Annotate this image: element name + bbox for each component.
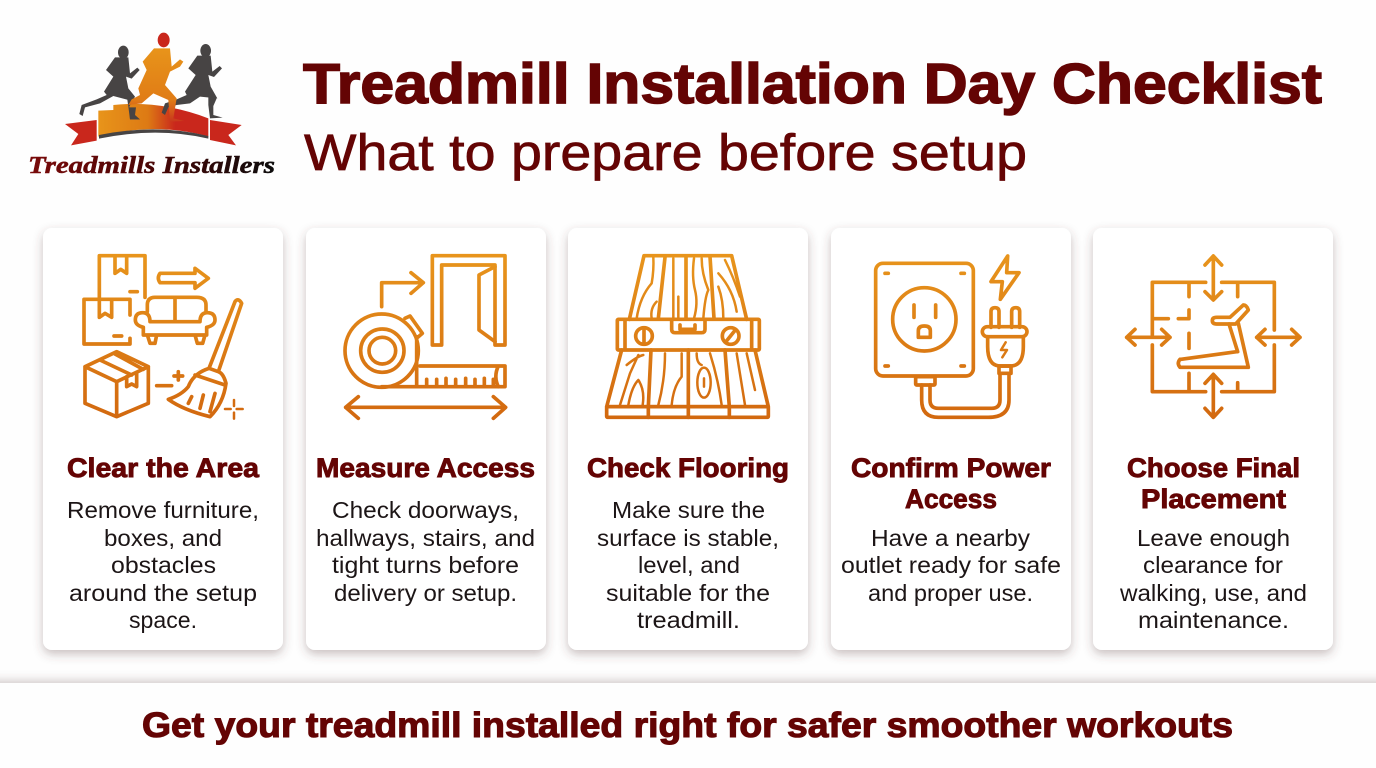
description: and proper use. — [868, 580, 1033, 606]
description — [597, 497, 779, 633]
icon: room plan with treadmill and arrows — [1127, 256, 1300, 417]
description: hallways, stairs, and — [316, 525, 535, 551]
description — [841, 525, 1061, 606]
panel: check flooring — [568, 228, 808, 650]
logo artwork: runners and ribbon — [65, 33, 242, 145]
description: tight turns before — [332, 552, 519, 578]
description: maintenance. — [1138, 607, 1289, 633]
logo wordmark: Treadmills Installers — [28, 153, 275, 179]
logo: Treadmills Installers — [28, 33, 275, 179]
description: walking, use, and — [1119, 580, 1307, 606]
heading: Choose Final — [1127, 453, 1300, 483]
description — [316, 497, 535, 606]
panel: confirm power access — [831, 228, 1071, 650]
description: space. — [129, 607, 197, 633]
panel: clear the area — [43, 228, 283, 650]
heading: Clear the Area — [67, 453, 260, 483]
description: surface is stable, — [597, 525, 779, 551]
description — [1119, 525, 1307, 633]
description: around the setup — [69, 580, 257, 606]
footer band — [0, 683, 1376, 768]
title: Treadmill Installation Day Checklist — [303, 52, 1322, 116]
description: Remove furniture, — [67, 497, 259, 523]
footer call to action: Get your treadmill installed right for safer smoother workouts — [142, 706, 1233, 745]
description: Leave enough — [1137, 525, 1290, 551]
icon: wood floor and spirit level — [607, 256, 768, 417]
icon: boxes, sofa and broom — [84, 256, 243, 419]
icon: wall outlet and plug — [876, 256, 1027, 417]
description: Have a nearby — [871, 525, 1030, 551]
heading — [1127, 453, 1300, 514]
heading: Measure Access — [316, 453, 535, 483]
panel: choose final placement — [1093, 228, 1333, 650]
description: delivery or setup. — [334, 580, 517, 606]
heading — [851, 453, 1052, 514]
description: Check doorways, — [332, 497, 519, 523]
description: obstacles — [111, 552, 216, 578]
heading: Confirm Power — [851, 453, 1052, 483]
description: Make sure the — [612, 497, 765, 523]
heading: Access — [905, 484, 997, 514]
description: level, and — [638, 552, 740, 578]
panel: measure access — [306, 228, 546, 650]
description: clearance for — [1143, 552, 1283, 578]
description: boxes, and — [104, 525, 222, 551]
heading: Check Flooring — [587, 453, 789, 483]
description: outlet ready for safe — [841, 552, 1061, 578]
description: suitable for the — [606, 580, 770, 606]
subtitle: What to prepare before setup — [304, 124, 1027, 181]
description: treadmill. — [637, 607, 740, 633]
heading: Placement — [1141, 484, 1286, 514]
icon: tape measure and doorway — [345, 256, 506, 418]
description — [67, 497, 259, 633]
